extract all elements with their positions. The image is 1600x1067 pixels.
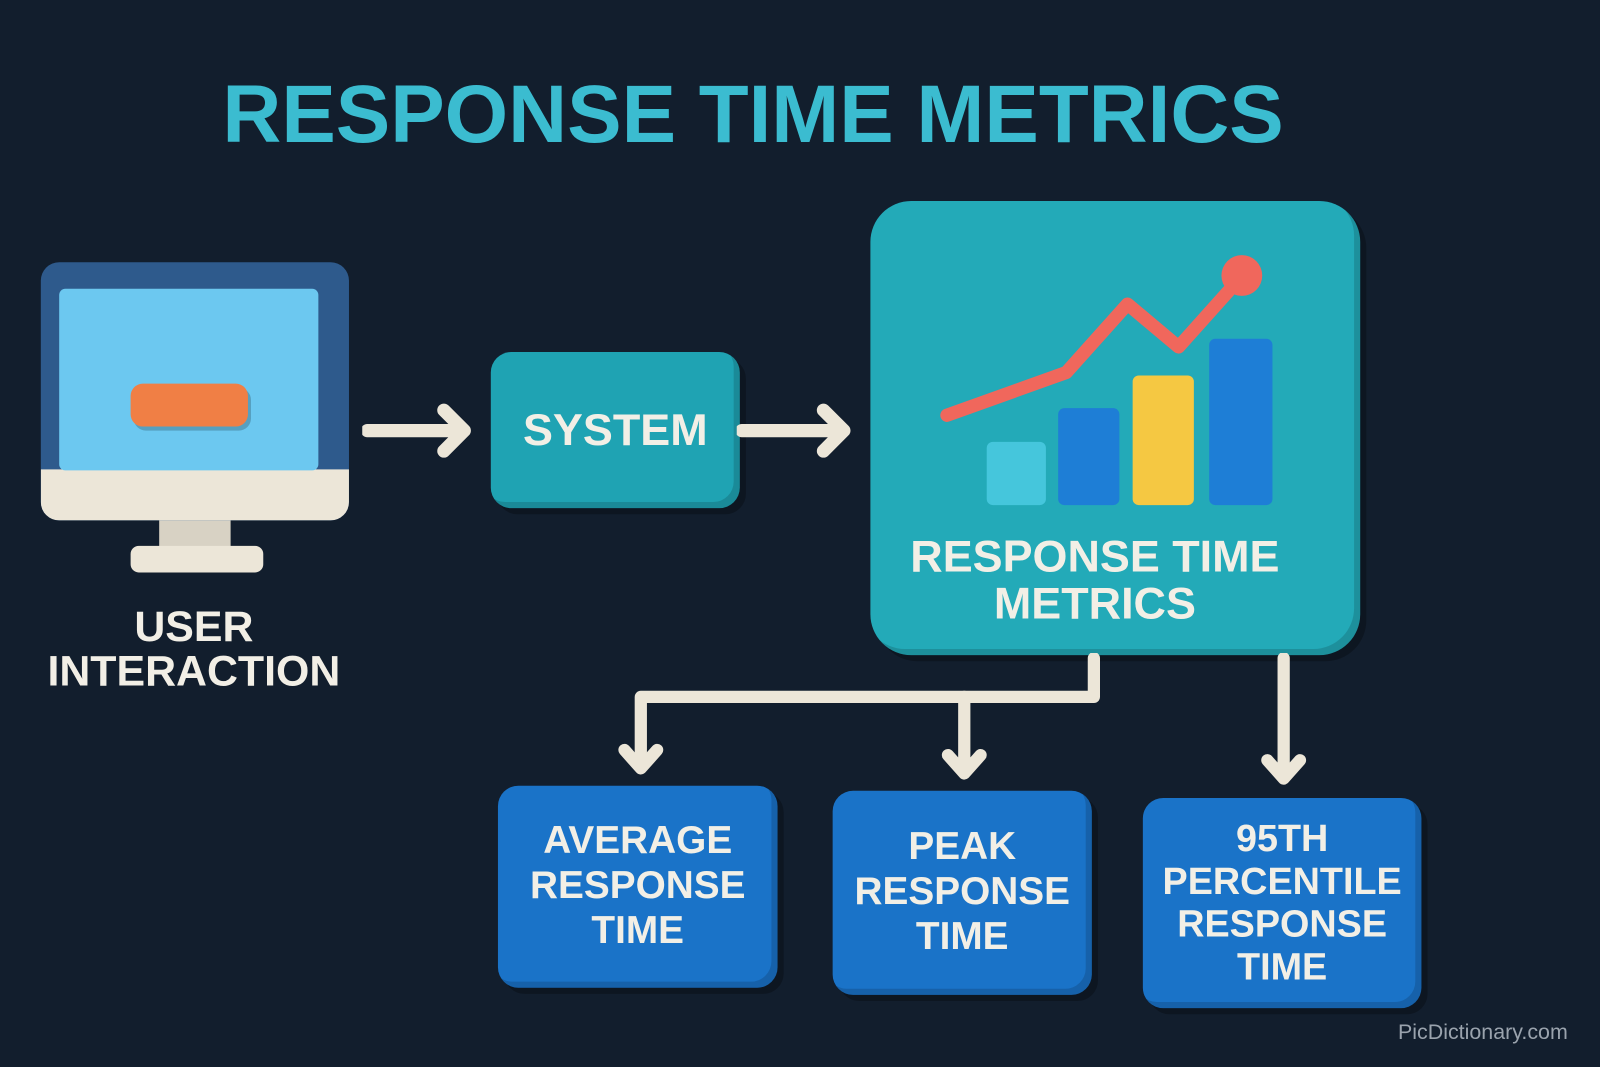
box: system: SYSTEM xyxy=(523,405,708,455)
panel label xyxy=(910,532,1280,629)
chart: line and bars xyxy=(940,255,1272,506)
box: peak response time xyxy=(833,791,1092,995)
box: 95th percentile: RESPONSE xyxy=(1177,903,1387,945)
box: peak response time: TIME xyxy=(916,915,1009,958)
watermark: PicDictionary.com xyxy=(1398,1020,1568,1044)
arrows: connectors to metric boxes xyxy=(618,653,1306,785)
label: user interaction xyxy=(47,602,340,695)
title: RESPONSE TIME METRICS xyxy=(222,68,1284,159)
box: system xyxy=(491,352,740,508)
label: user interaction: INTERACTION xyxy=(47,647,340,695)
panel label: RESPONSE TIME xyxy=(910,532,1280,582)
icon: monitor xyxy=(40,262,349,572)
label: user interaction: USER xyxy=(134,602,253,650)
box: average response time xyxy=(498,786,778,988)
box: average response time: AVERAGE xyxy=(543,820,732,863)
box: peak response time: PEAK xyxy=(908,826,1016,869)
panel label: METRICS xyxy=(994,579,1196,629)
panel: response time metrics xyxy=(870,201,1360,655)
box: 95th percentile: PERCENTILE xyxy=(1163,860,1402,902)
box: 95th percentile xyxy=(1143,798,1421,1008)
arrow: monitor to system xyxy=(362,404,471,458)
box: 95th percentile: TIME xyxy=(1237,946,1327,988)
box: average response time: TIME xyxy=(591,909,684,952)
box: peak response time: RESPONSE xyxy=(854,871,1070,913)
box: 95th percentile: 95TH xyxy=(1236,818,1328,860)
box: average response time: RESPONSE xyxy=(530,864,745,907)
arrow: system to metrics xyxy=(736,404,850,458)
